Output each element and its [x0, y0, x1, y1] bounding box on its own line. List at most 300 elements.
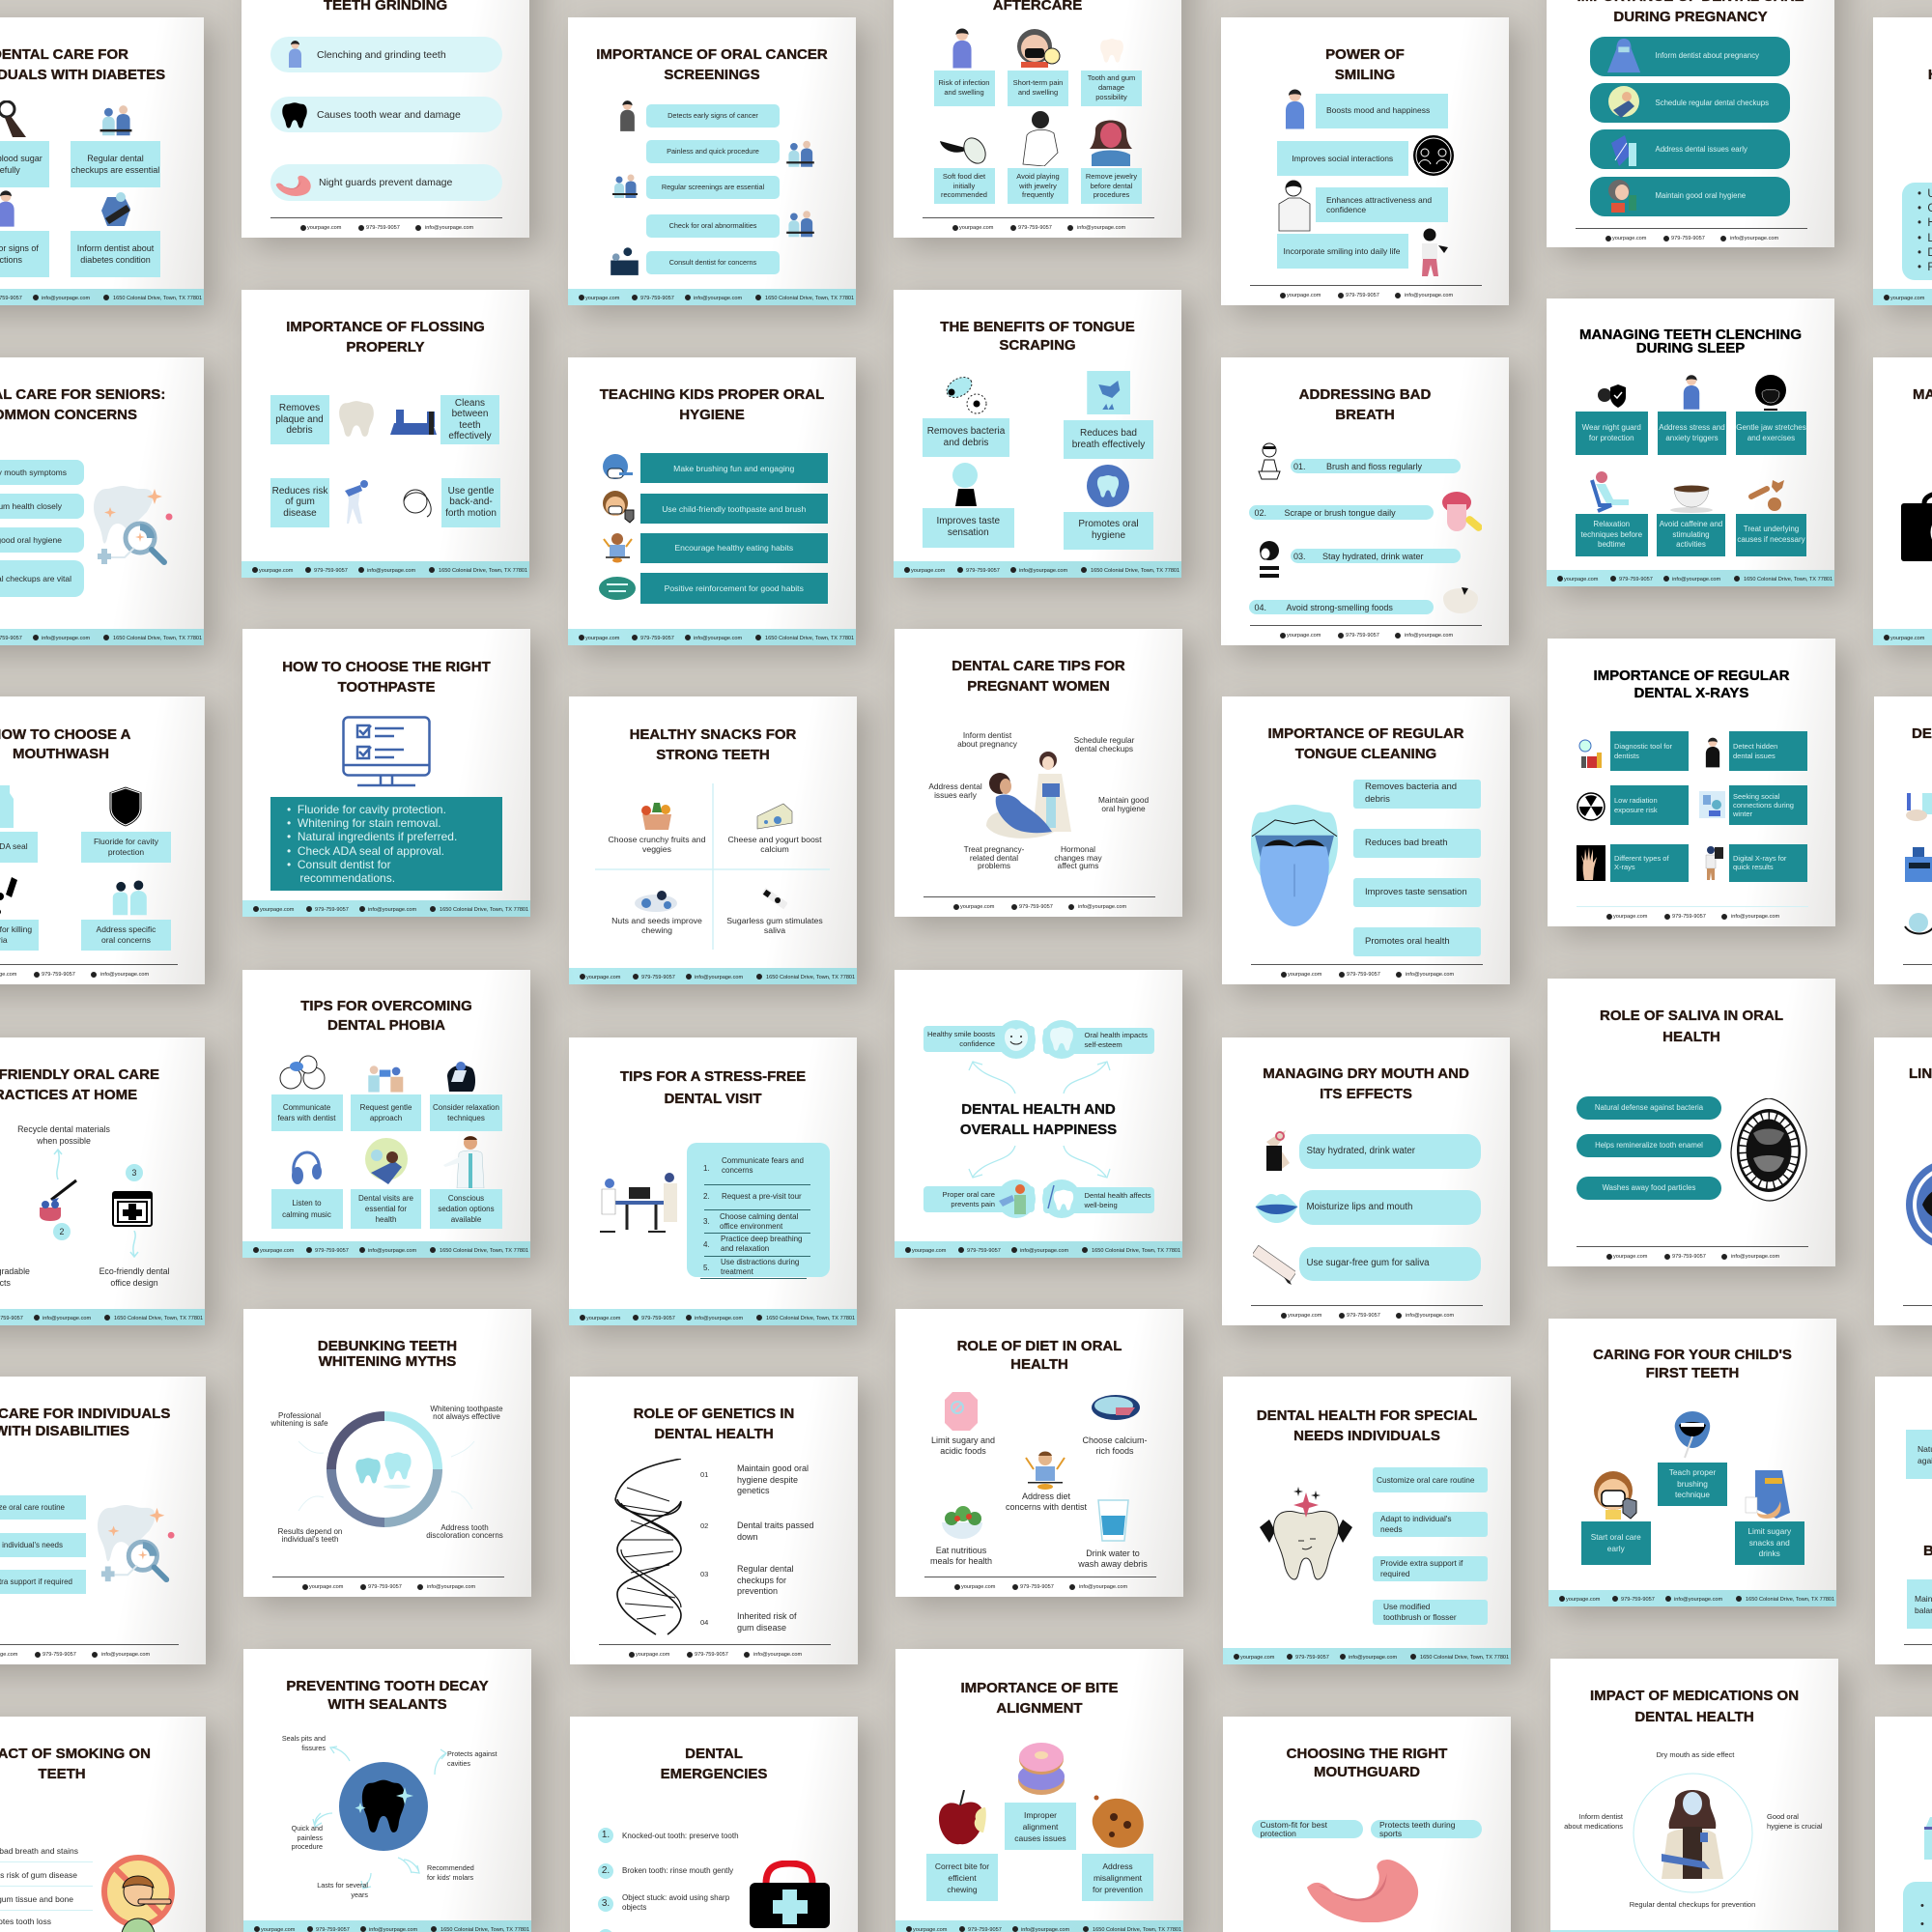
heading: SCREENINGS [664, 66, 760, 83]
text: address diet [993, 1492, 1099, 1513]
badge 2 [53, 1223, 71, 1240]
icon: blue square [1086, 371, 1130, 414]
illustration: patient and dentist [986, 751, 1084, 839]
heading: ROLE OF GENETICS IN [634, 1406, 794, 1422]
box: visits: health [376, 1215, 396, 1224]
text: toothpaste: Whitening toothpaste [430, 1405, 503, 1413]
box: relaxation: techniques before [1580, 529, 1642, 539]
heading [1548, 668, 1835, 702]
text: treat: related dental [970, 852, 1018, 862]
footer [0, 1309, 205, 1325]
panel: teaching kids [568, 357, 856, 645]
text: hormonal: Hormonal [1061, 844, 1095, 854]
icon: splash [1903, 907, 1932, 938]
box: night guard: Wear night guard [1582, 423, 1641, 432]
chart: donut ring [327, 1411, 442, 1527]
text: gum [707, 916, 842, 935]
heading: FIRST TEETH [1646, 1365, 1739, 1381]
footer [1548, 1590, 1836, 1606]
text: professional: whitening is safe [270, 1419, 328, 1428]
callout: smile: Healthy smile boosts [927, 1030, 995, 1037]
footer [243, 1920, 531, 1932]
text: gum: Sugarless gum stimulates [726, 916, 823, 925]
item 2: 2. [703, 1192, 710, 1201]
panel: power of smiling [1221, 17, 1509, 305]
footer: info@yourpage.com [367, 568, 415, 574]
icon: consultation desk [600, 1172, 683, 1234]
panel: bad breath [1221, 357, 1509, 645]
box: snacks: Limit sugary [1747, 1526, 1791, 1536]
pill 04: 04. [1254, 603, 1266, 612]
box: bacteria: and debris [944, 438, 988, 448]
bullet list panel: • Fluoride for cavity protection. [287, 803, 446, 816]
pill: custom fit: Custom-fit for best [1260, 1820, 1327, 1830]
text: dental traits: Dental traits passed [737, 1520, 814, 1530]
icon: duo 2 [786, 211, 814, 238]
heading [243, 1677, 531, 1714]
footer: info@yourpage.com [694, 296, 742, 301]
box: gentle [441, 477, 500, 527]
box: jaw: and exercises [1747, 433, 1795, 442]
heading [243, 1339, 531, 1371]
text: inform: about pregnancy [957, 738, 1017, 748]
icon: doctor [1702, 735, 1723, 770]
heading [1223, 1406, 1511, 1446]
footer: info@yourpage.com [1019, 568, 1067, 574]
text: dental traits: down [737, 1532, 758, 1542]
box: causes: Treat underlying [1744, 525, 1799, 533]
panel: seniors common concerns [0, 357, 204, 645]
footer: info@yourpage.com [1406, 1312, 1454, 1318]
box: soft food: recommended [941, 190, 987, 199]
pill: night guards: Night guards prevent damage [319, 177, 452, 188]
text: inform: Inform dentist [1579, 1812, 1623, 1821]
icon: grinning boy [1592, 1471, 1640, 1520]
footer: info@yourpage.com [695, 974, 743, 980]
heading: MANAGING DRY MOUTH AND [1263, 1065, 1469, 1082]
box: cleans: Cleans [455, 398, 485, 409]
item 5: Use distractions during [721, 1258, 799, 1266]
heading [1547, 328, 1834, 355]
callout: smile: confidence [959, 1039, 995, 1047]
box: digital: Digital X-rays for [1733, 854, 1786, 863]
box: early [1580, 1521, 1651, 1565]
text: protects [447, 1749, 515, 1768]
pill 2 [1590, 83, 1790, 123]
footer: info@yourpage.com [1731, 914, 1779, 920]
text: inherited: gum disease [737, 1623, 786, 1633]
footer: info@yourpage.com [1406, 972, 1454, 978]
box: plaque: plaque and [275, 414, 324, 425]
box: hygiene: hygiene [1092, 530, 1125, 541]
footer: 979-759-9057 [966, 568, 1000, 574]
bar 2: Use child-friendly toothpaste and brush [662, 504, 806, 514]
footer [568, 289, 856, 305]
icon: white tooth circle [1042, 1179, 1081, 1218]
panel: cropped camera card [1873, 357, 1932, 645]
icon: smiling boy [602, 491, 635, 524]
panel: dry mouth [1222, 1037, 1510, 1325]
icon: girl sketch [404, 489, 432, 518]
box: visits: Dental visits are [358, 1194, 413, 1203]
item 4: Practice deep breathing [721, 1235, 802, 1243]
pill 1 [0, 460, 84, 485]
footer: 979-759-9057 [315, 1248, 349, 1254]
box: communicate: Communicate [283, 1103, 330, 1112]
icon: headphones [290, 1151, 323, 1185]
text: nuts: Nuts and seeds improve [611, 916, 702, 925]
badge 1 [598, 1828, 613, 1843]
text: maintain: oral hygiene [1101, 804, 1146, 813]
box: social: connections during [1733, 801, 1794, 810]
pill 4: Maintain good oral hygiene [1656, 191, 1746, 200]
icon: open mouth engraving [1730, 1098, 1807, 1202]
text: hormonal: changes may [1054, 852, 1102, 862]
box: inform dentist: diabetes condition [80, 255, 151, 265]
icon: brush and paste [1905, 791, 1932, 822]
text: professional: Professional [278, 1411, 321, 1420]
icon: relaxing person [1588, 470, 1634, 514]
pill: gum [1299, 1246, 1481, 1281]
heading: DEBUNKING TEETH [318, 1338, 457, 1354]
box: adapt: Adapt to individual's [1380, 1514, 1452, 1523]
box: improper: alignment [1023, 1822, 1058, 1832]
pill 3: Address dental issues early [1656, 145, 1747, 153]
box: diagnostic [1610, 731, 1689, 771]
heading: TEACHING KIDS PROPER ORAL [600, 386, 824, 403]
icon: doctor [441, 1134, 490, 1188]
icon: talking heads [279, 1055, 327, 1094]
panel: care during pregnancy [1547, 0, 1834, 247]
box: mood [1316, 93, 1448, 128]
text: quick: procedure [292, 1842, 323, 1851]
box: ADA seal [0, 832, 38, 863]
box: gentle: Use gentle [448, 486, 494, 497]
panel: whitening myths [243, 1309, 531, 1597]
panel: saliva [1548, 979, 1835, 1266]
heading [1223, 1745, 1511, 1781]
box: caffeine: Avoid caffeine and [1660, 520, 1722, 528]
pill 4: Check for oral abnormalities [669, 221, 756, 230]
text: protects: cavities [447, 1758, 470, 1768]
footer [1577, 1246, 1808, 1266]
callout: pain [923, 1186, 1035, 1212]
panel: tongue scraping [894, 290, 1181, 578]
icon: person circle [997, 1179, 1036, 1218]
box: relaxation: bedtime [1598, 540, 1625, 549]
box: stress [1658, 412, 1726, 455]
heading [242, 657, 530, 697]
text: treat: problems [978, 861, 1010, 870]
box: gentle [351, 1094, 421, 1131]
footer: info@yourpage.com [100, 972, 149, 978]
box: support: required [1380, 1569, 1409, 1578]
heading [569, 724, 857, 765]
box: remove: Remove jewelry [1086, 172, 1137, 181]
heading: DENTAL HEALTH FOR SPECIAL [1257, 1407, 1477, 1424]
footer [1223, 1648, 1511, 1664]
text: dental traits [737, 1520, 834, 1543]
text 3 [622, 1893, 748, 1912]
box: sedation: available [451, 1215, 481, 1224]
heading: STRONG TEETH [656, 747, 770, 763]
footer [568, 629, 856, 645]
box: hidden: dental issues [1733, 752, 1776, 759]
box: address: Address [1102, 1861, 1133, 1870]
text: nutritious: meals for health [930, 1556, 992, 1566]
icon: thinking man [1279, 180, 1310, 232]
icon: pink octagon [945, 1392, 978, 1431]
panel: teeth clenching [1547, 298, 1834, 586]
icon: brush and gums [38, 1179, 81, 1223]
footer: 979-759-9057 [1672, 1254, 1706, 1260]
panel: dental x-rays [1548, 639, 1835, 926]
icon: blue circle [1905, 1158, 1932, 1251]
heading [1325, 46, 1405, 83]
pill 02: Scrape or brush tongue daily [1285, 508, 1396, 518]
text: inherited [737, 1611, 834, 1634]
box: short-term [1008, 70, 1068, 106]
box: gentle: back-and- [449, 497, 493, 507]
footer: yourpage.com [1287, 632, 1321, 638]
footer: 979-759-9057 [1621, 1596, 1655, 1602]
footer: yourpage.com [1240, 1654, 1274, 1660]
bullet list panel: • Check ADA seal of approval. [287, 844, 444, 858]
icon: coffee cup [1668, 482, 1713, 513]
footer: 1650 Colonial Drive, Town, TX 77801 [765, 636, 854, 641]
box: correct: chewing [947, 1884, 978, 1893]
box: sedation: Conscious [448, 1194, 484, 1203]
box: adapt [0, 1533, 86, 1557]
text: cheese: Cheese and yogurt boost [727, 835, 822, 844]
illustration: strong tooth [1256, 1485, 1356, 1580]
pill 4 [1590, 176, 1790, 216]
footer: 979-759-9057 [695, 1652, 728, 1658]
heading [1221, 385, 1509, 425]
heading: HOW TO CHOOSE THE RIGHT [282, 659, 491, 675]
icon: tongue scraper [1441, 491, 1482, 533]
text: maintain: hygiene despite [737, 1475, 798, 1485]
panel: dental phobia [242, 970, 530, 1258]
box: caffeine: stimulating [1672, 529, 1710, 539]
icon: coconut [940, 137, 986, 164]
box: gentle: forth motion [445, 508, 497, 519]
footer: yourpage.com [1564, 576, 1598, 582]
box: remove [1081, 168, 1142, 204]
footer [895, 1920, 1183, 1932]
text: calcium: rich foods [1095, 1446, 1134, 1456]
footer: info@yourpage.com [1672, 576, 1720, 582]
numbered list panel [687, 1143, 830, 1277]
icon: bottle [0, 785, 15, 828]
text: crunchy: veggies [642, 844, 671, 854]
footer: yourpage.com [259, 568, 293, 574]
box: bacteria: Removes bacteria and [1365, 781, 1457, 792]
panel: child's first teeth [1548, 1319, 1836, 1606]
text: discoloration: discoloration concerns [426, 1531, 503, 1540]
box: taste: Improves taste sensation [1365, 887, 1467, 897]
text: inform [949, 731, 1026, 748]
icon: dentists group [390, 410, 437, 435]
footer [1550, 1930, 1838, 1932]
text 1: Knocked-out tooth: preserve tooth [622, 1832, 739, 1840]
icon: magnifier [0, 100, 26, 137]
bullet list panel [270, 797, 502, 891]
badge 3 [126, 1164, 143, 1181]
pill: night guards [270, 164, 502, 201]
callout: pain: prevents pain [951, 1200, 995, 1208]
box: xray types [1610, 844, 1689, 882]
pill 03 [1291, 549, 1461, 563]
box: health: Promotes oral health [1365, 936, 1450, 947]
bar 2 [639, 494, 828, 524]
icon: blue kit [1903, 845, 1932, 882]
text: inform: about medications [1564, 1822, 1623, 1831]
pill: food particles [1577, 1177, 1721, 1200]
box: breath: Reduces bad breath [1365, 838, 1448, 848]
footer: info@yourpage.com [368, 1248, 416, 1254]
pill: clenching [270, 37, 502, 72]
box: address concerns: Address specific [97, 923, 156, 933]
footer: 979-759-9057 [1020, 1584, 1054, 1590]
text: address: Address dental [928, 781, 982, 791]
box: relaxation [1576, 514, 1648, 556]
box: relaxation: techniques [447, 1114, 485, 1122]
box: risk: Risk of infection [939, 78, 989, 87]
box: brushing: Teach proper [1669, 1467, 1716, 1477]
heading: DURING SLEEP [1636, 340, 1745, 356]
box: gum disease: Reduces risk [272, 486, 327, 497]
icon: dental visit badge [365, 1138, 408, 1186]
footer: info@yourpage.com [425, 224, 473, 230]
item 1: 1. [703, 1164, 710, 1173]
heading: PROPERLY [346, 338, 425, 355]
box: damage: Tooth and gum [1088, 73, 1135, 82]
text: maintain [737, 1463, 834, 1497]
icon: doctor with film [1702, 845, 1723, 880]
box: avoid: with jewelry [1019, 182, 1057, 190]
footer: 979-759-9057 [641, 1316, 675, 1321]
box: health [1353, 927, 1481, 956]
text: regular: checkups for [737, 1576, 786, 1585]
text: 03: 03 [700, 1570, 708, 1578]
box: improper [1005, 1803, 1076, 1850]
box: early: early [1607, 1544, 1625, 1553]
pill: lips [1299, 1190, 1481, 1225]
text: recycle: when possible [37, 1136, 91, 1146]
bar 1 [639, 453, 828, 483]
heading: MOUTHGUARD [1314, 1764, 1420, 1780]
box: cleans: teeth [459, 419, 481, 431]
box: digital [1729, 844, 1807, 882]
pill 3 [0, 527, 84, 553]
footer: 1650 Colonial Drive, Town, TX 77801 [440, 906, 528, 912]
item 3 [704, 1210, 810, 1234]
arrow down [128, 1231, 140, 1258]
box: watch for infections [0, 231, 49, 277]
box: adapt [1373, 1512, 1488, 1537]
pill 04 [1249, 600, 1434, 614]
heading: MANAGING TEETH CLENCHING [1579, 327, 1802, 343]
box: hygiene [1064, 512, 1153, 550]
heading: ADDRESSING BAD [1299, 386, 1431, 403]
panel: special needs [1223, 1377, 1511, 1664]
box: address [1082, 1854, 1153, 1901]
box: mood: Boosts mood and happiness [1326, 105, 1430, 115]
box: gum disease [270, 477, 329, 527]
text: quick: Quick and [292, 1824, 323, 1833]
footer: yourpage.com [260, 906, 294, 912]
icon: pregnant figure [1607, 39, 1640, 73]
box: causes: causes if necessary [1737, 535, 1805, 544]
pill: protects [1371, 1820, 1482, 1838]
item 4: and relaxation [721, 1244, 769, 1253]
callout: well-being: well-being [1084, 1200, 1118, 1209]
box: communicate [270, 1094, 342, 1131]
icon: radiation [1577, 792, 1605, 821]
footer: 979-759-9057 [641, 974, 675, 980]
text: results: Results depend on [278, 1527, 342, 1536]
text: regular: Regular dental checkups for prevention [1630, 1900, 1755, 1909]
pill: defense: Natural defense against bacteria [1595, 1103, 1703, 1112]
footer: 979-759-9057 [314, 568, 348, 574]
text: 04: 04 [700, 1618, 708, 1627]
footer: 1650 Colonial Drive, Town, TX 77801 [1746, 1596, 1834, 1602]
heading: PREVENTING TOOTH DECAY [286, 1678, 489, 1694]
heading [895, 1679, 1183, 1719]
box: social [1729, 785, 1807, 825]
box: night guard [1576, 412, 1648, 455]
footer [569, 1309, 857, 1325]
footer: info@yourpage.com [694, 636, 742, 641]
icon: black kit [1901, 490, 1932, 567]
heading: HEALTH [1010, 1356, 1068, 1373]
text: biodegradable [0, 1265, 52, 1289]
text: 02: 02 [700, 1521, 708, 1530]
icon: family [1285, 89, 1304, 129]
icon: woman with jewelry [1022, 111, 1059, 166]
text: maintain: genetics [737, 1486, 770, 1495]
item 4 [704, 1234, 810, 1257]
icon: two dentists [110, 877, 151, 918]
box: radiation: exposure risk [1614, 806, 1658, 813]
box: regular checkups: Regular dental [87, 154, 144, 163]
text: professional [261, 1412, 338, 1429]
badge 2: 2 [60, 1227, 64, 1236]
icon: sad tooth [339, 401, 374, 437]
text: lasts: years [351, 1889, 368, 1899]
panel: cropped list card [1873, 17, 1932, 305]
box: damage: damage [1098, 83, 1124, 92]
box: damage: possibility [1095, 93, 1127, 101]
box: diagnostic: dentists [1614, 752, 1639, 759]
text: regular: Regular dental [737, 1564, 794, 1574]
pill: hydrated [1299, 1134, 1481, 1169]
callout: self-esteem: self-esteem [1084, 1040, 1122, 1049]
heading [596, 46, 828, 83]
box: cleans: between [452, 409, 488, 419]
footer: 979-759-9057 [368, 1584, 402, 1590]
heading: POWER OF [1325, 46, 1405, 63]
icon: woman at dentist [1090, 120, 1132, 166]
heading: SMILING [1335, 66, 1395, 83]
text: gum: saliva [764, 925, 785, 935]
box: address concerns: oral concerns [101, 935, 151, 945]
bar 3 [639, 533, 828, 562]
box: toothbrush: toothbrush or flosser [1383, 1612, 1457, 1622]
box: fluoride: Fluoride for cavity [94, 837, 158, 846]
text: nutritious: Eat nutritious [936, 1546, 986, 1555]
